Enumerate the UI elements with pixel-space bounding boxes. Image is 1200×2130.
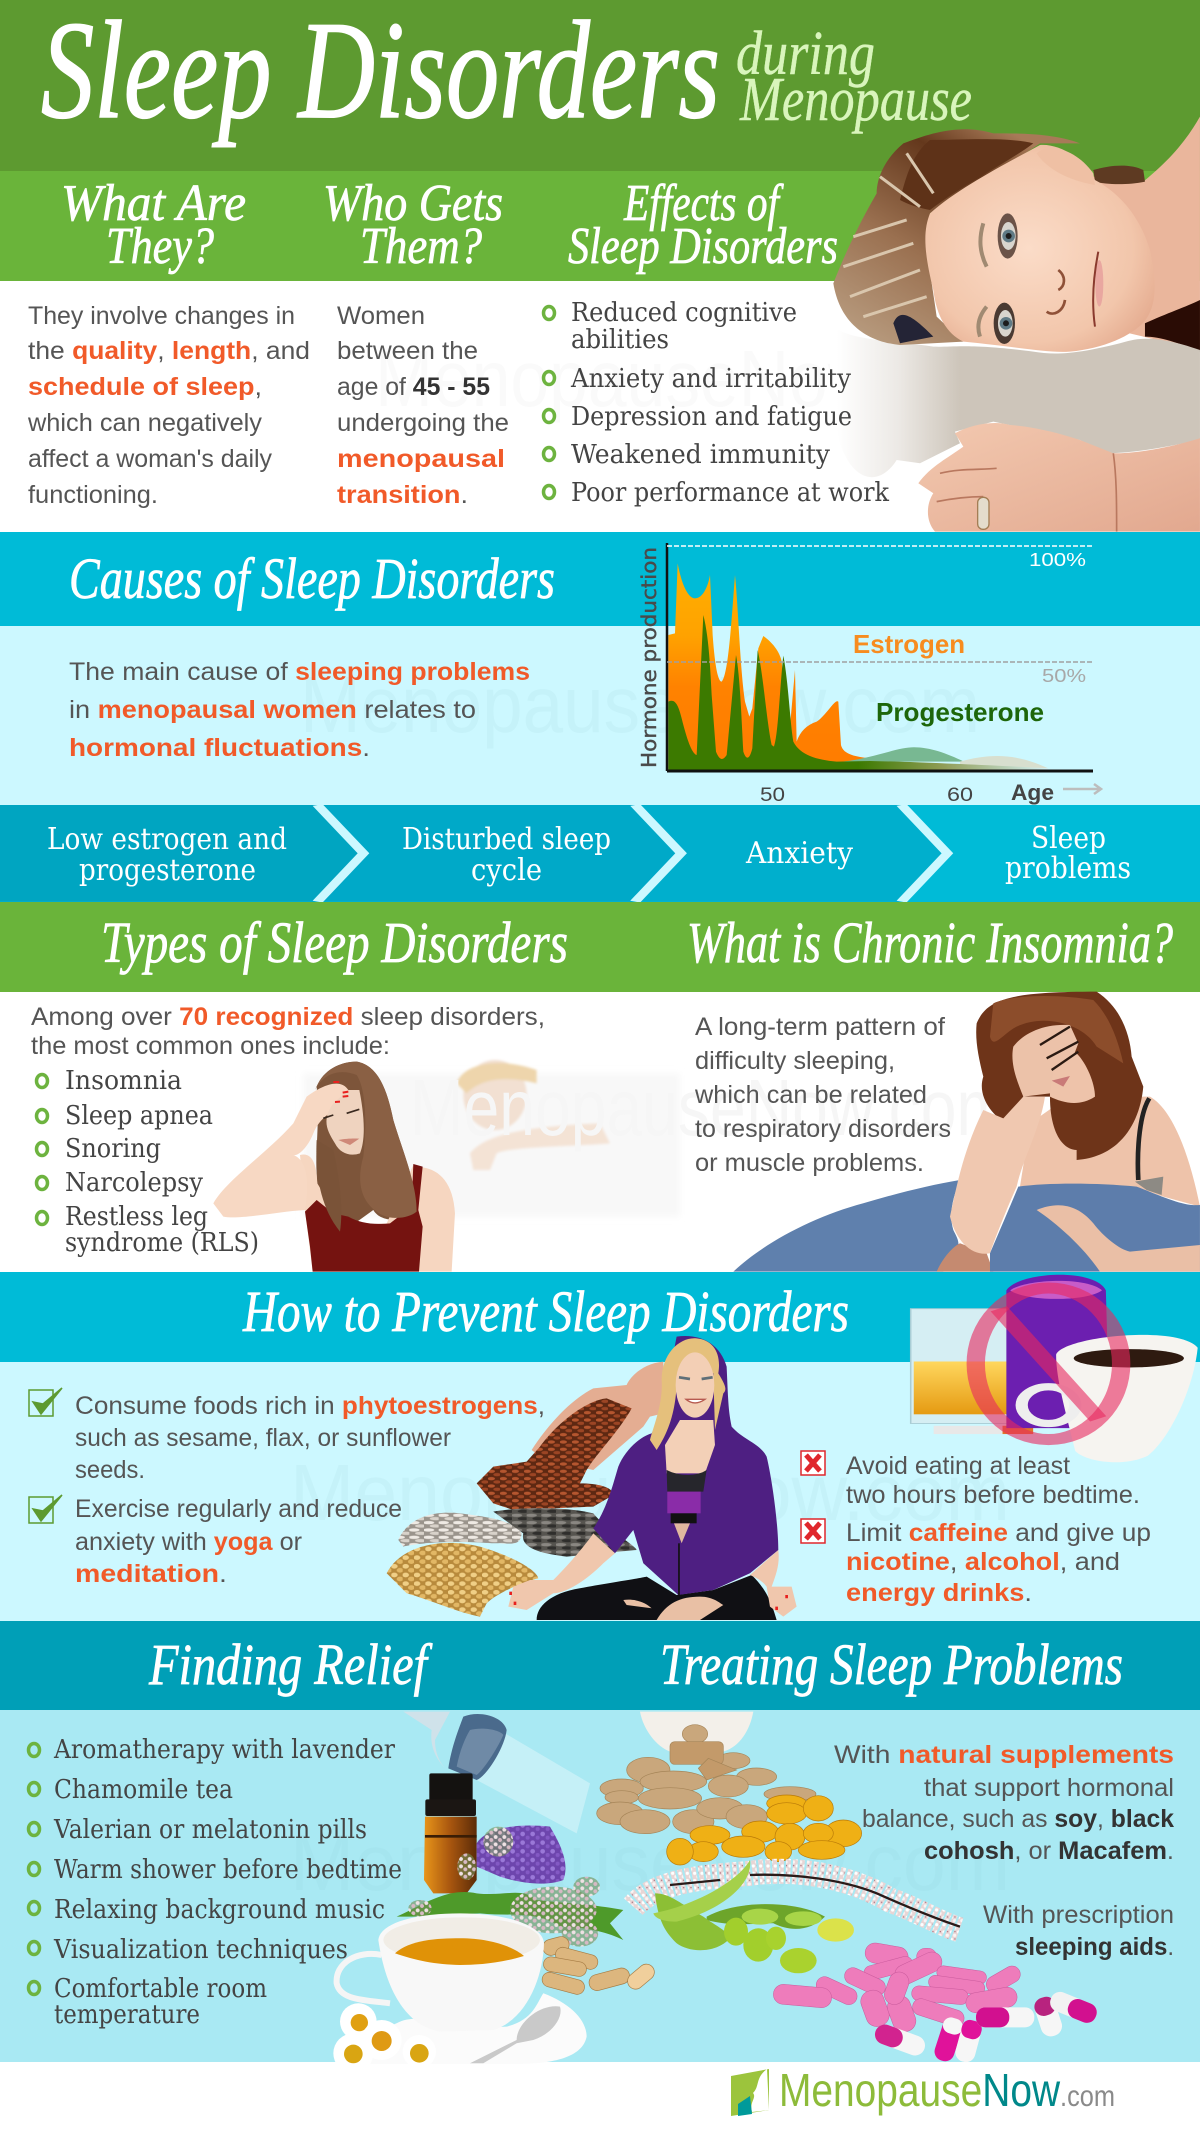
face <box>925 145 1155 352</box>
chart labels: Progesterone <box>876 697 1044 727</box>
text block: main cause <box>69 658 530 762</box>
process: chevron flow <box>0 805 1200 902</box>
text block: limit caffeine: Limit caffeine and give up <box>846 1519 1151 1547</box>
icon: logo profile <box>731 2069 769 2116</box>
heading: finding relief: Finding Relief <box>148 1632 433 1697</box>
icon: prohibition sign <box>976 1288 1121 1440</box>
step 4: problems <box>1005 851 1131 886</box>
nose <box>1047 270 1065 314</box>
icon: tablets <box>597 1725 816 1834</box>
face <box>326 1090 364 1155</box>
front hair <box>315 1062 417 1218</box>
raised arm <box>213 1084 348 1217</box>
text block: chronic insomnia: or muscle problems. <box>695 1149 924 1177</box>
chart labels: Age <box>1011 780 1054 805</box>
spray <box>477 1733 590 1833</box>
illustration: woman meditating <box>508 1336 797 1620</box>
footer logo <box>731 2064 1115 2116</box>
back hair <box>316 1062 417 1232</box>
chart labels: 100% <box>1029 550 1086 570</box>
arrow: age axis <box>1063 784 1101 794</box>
text block: exercise <box>75 1495 402 1588</box>
text block: phytoestrogens <box>75 1392 545 1484</box>
illustration: aromatherapy and tea <box>333 1712 658 2073</box>
text block: phytoestrogens: Consume foods rich in phytoestrogens , <box>75 1392 545 1420</box>
icon: check 1 <box>29 1388 62 1416</box>
text block: natural supplements: With natural supplements <box>834 1741 1174 1769</box>
list: effects: Depression and fatigue <box>571 402 852 432</box>
hair <box>976 992 1143 1160</box>
illustration: supplements <box>597 1712 960 1973</box>
step 1 <box>47 822 287 888</box>
bra strap <box>1138 1098 1149 1180</box>
text block: what are they: which can negatively <box>27 409 262 437</box>
text block: what are they: the quality, length, and <box>28 337 310 365</box>
arms <box>508 1533 797 1617</box>
text block: who gets them: transition . <box>337 481 468 509</box>
scoop <box>532 1362 663 1470</box>
text block: avoid eating <box>846 1452 1140 1509</box>
icon: essential oil bottle <box>424 1773 477 1893</box>
text block: limit caffeine: nicotine , alcohol , and <box>846 1548 1120 1576</box>
lips <box>1093 252 1103 327</box>
heading: Who Gets Them?: Who Gets <box>323 175 503 232</box>
chart labels: 50 <box>760 785 785 806</box>
list: types: Snoring <box>65 1134 161 1164</box>
list: types: Insomnia <box>65 1066 182 1096</box>
two-tone capsules <box>872 1989 1100 2064</box>
panel: title banner <box>0 0 1200 171</box>
text block: what are they: functioning. <box>28 481 158 509</box>
red top <box>305 1164 423 1272</box>
heading: What Are They?: What Are <box>61 175 246 232</box>
text block: chronic insomnia: which can be related <box>694 1081 927 1109</box>
step 2: Disturbed sleep <box>402 822 611 857</box>
chest <box>665 1420 715 1473</box>
logo wordmark: MenopauseNow.com <box>779 2064 1115 2116</box>
heading: Who Gets Them? <box>323 175 503 275</box>
icon: teacup <box>337 1913 544 2032</box>
illustration: blurred sleeper <box>303 1060 680 1217</box>
icon: pink capsules <box>773 1941 1100 2064</box>
pillow <box>830 327 1200 477</box>
white sunflower seeds <box>398 1513 522 1547</box>
list: effects: abilities <box>571 325 669 355</box>
chart labels: 50% <box>1042 666 1086 686</box>
list: effects: Reduced cognitive <box>571 298 797 328</box>
sports top <box>667 1470 707 1595</box>
icon: daisies <box>333 2003 436 2073</box>
text block: exercise: meditation . <box>75 1560 227 1588</box>
list: types: syndrome (RLS) <box>65 1228 259 1258</box>
chart: hormone production <box>637 543 1101 806</box>
text block: who gets them: age of 45 - 55 <box>337 373 490 401</box>
text block: prescription <box>983 1901 1174 1961</box>
neck and shoulder <box>1087 117 1200 350</box>
step 4 <box>1005 821 1131 886</box>
illustration: avoided drinks <box>911 1275 1198 1462</box>
step 2: cycle <box>471 853 542 888</box>
icon: lavender <box>477 1825 565 1884</box>
step 4: Sleep <box>1031 821 1106 856</box>
hoodie <box>593 1336 778 1595</box>
icon: herbs <box>397 1892 623 1940</box>
text block: who gets them: between the <box>337 337 478 365</box>
ring <box>978 497 989 529</box>
text block: types intro: Among over 70 recognized sleep disorders, <box>31 1003 545 1031</box>
chart labels: Hormone production <box>637 547 661 768</box>
hair <box>833 129 1080 345</box>
nails <box>511 1592 787 1610</box>
icon: shower head <box>403 1712 507 1780</box>
watermark: MenopauseNow.com <box>300 660 980 749</box>
list: types: Narcolepsy <box>65 1168 203 1198</box>
heading: types: Types of Sleep Disorders <box>101 910 568 975</box>
subtitle: during Menopause: during <box>736 20 875 88</box>
watermark: MenopauseNow.com <box>375 334 1025 423</box>
icon: pill bottle <box>640 1712 753 1752</box>
watermark: MenopauseNow.com <box>290 1448 1010 1537</box>
chart labels <box>637 547 1086 806</box>
list: effects: Weakened immunity <box>571 440 830 470</box>
heading: Effects of Sleep Disorders: Sleep Disorders <box>568 218 838 275</box>
text block: phytoestrogens: seeds. <box>75 1456 145 1484</box>
text block: types intro <box>31 1003 545 1060</box>
illustration: woman resting on pillow <box>830 117 1200 532</box>
illustration: tired woman with blanket <box>733 992 1200 1272</box>
text block: natural supplements <box>834 1741 1174 1865</box>
eyes <box>978 213 1018 344</box>
heading: prevention: How to Prevent Sleep Disorders <box>242 1279 849 1344</box>
text block: what are they: affect a woman's daily <box>28 445 272 473</box>
heading: Effects of Sleep Disorders <box>568 175 838 275</box>
text block: limit caffeine: energy drinks . <box>846 1579 1032 1607</box>
text block: avoid eating: two hours before bedtime. <box>846 1481 1140 1509</box>
icon: x box 2 <box>801 1519 825 1543</box>
panel: causes <box>0 532 1200 806</box>
feet <box>623 1597 723 1620</box>
text block: exercise: anxiety with yoga or <box>75 1528 302 1556</box>
text block: what are they <box>27 302 310 509</box>
heading: Effects of Sleep Disorders: Effects of <box>623 175 784 232</box>
lower skin <box>937 1243 993 1272</box>
text block: exercise: Exercise regularly and reduce <box>75 1495 402 1523</box>
text block: who gets them: Women <box>337 302 425 330</box>
heading: causes: Causes of Sleep Disorders <box>69 546 555 611</box>
text block: main cause: hormonal fluctuations . <box>69 734 370 762</box>
list: relief: Visualization techniques <box>53 1935 348 1965</box>
step 1: Low estrogen and <box>47 822 287 857</box>
list: relief: Aromatherapy with lavender <box>53 1735 396 1765</box>
step 2 <box>402 822 611 888</box>
face <box>676 1352 714 1418</box>
lower hand <box>1037 1205 1200 1272</box>
text block: avoid eating: Avoid eating at least <box>846 1452 1070 1480</box>
subtitle: during Menopause <box>736 20 972 134</box>
text block: who gets them <box>337 302 509 509</box>
heading: Who Gets Them?: Them? <box>360 218 482 275</box>
panel: intro section <box>0 117 1200 532</box>
text block: what are they: schedule of sleep , <box>28 373 262 401</box>
heading: What Are They?: They? <box>106 218 214 275</box>
watermark: MenopauseNow.com <box>290 1818 1010 1907</box>
nails <box>333 1082 348 1102</box>
torso and right arm <box>300 1155 455 1272</box>
heading: What Are They? <box>61 175 246 275</box>
list: types <box>36 1066 259 1258</box>
face <box>1050 1053 1095 1103</box>
text block: main cause: in menopausal women relates to <box>69 696 476 724</box>
text block: types intro: the most common ones include: <box>31 1032 390 1060</box>
text block: who gets them: menopausal <box>337 445 505 473</box>
icon: green pods <box>653 1860 854 1973</box>
icon: valerian flowers <box>408 1827 600 1947</box>
illustration: woman with headache <box>213 1062 455 1272</box>
panel: types and chronic insomnia <box>0 902 1200 1272</box>
blanket right <box>990 1184 1200 1272</box>
icon: x box 1 <box>801 1451 825 1475</box>
icon: saucer <box>363 1993 587 2064</box>
text block: limit caffeine <box>846 1519 1151 1607</box>
legs <box>537 1575 777 1620</box>
step 1: progesterone <box>79 853 256 888</box>
text block: prescription: With prescription <box>983 1901 1174 1929</box>
list: effects <box>544 298 889 508</box>
hand over face <box>1012 1025 1078 1097</box>
hand and forearm <box>918 423 1200 532</box>
text block: natural supplements: balance, such as soy, black <box>862 1805 1174 1833</box>
torso <box>1020 1097 1200 1207</box>
text block: natural supplements: that support hormonal <box>924 1774 1174 1802</box>
icon: herbal capsules <box>540 1935 658 1996</box>
illustration: seeds <box>387 1362 663 1617</box>
text block: natural supplements: cohosh, or Macafem. <box>924 1837 1174 1865</box>
subtitle: during Menopause: Menopause <box>739 66 972 134</box>
panel: relief and treatment <box>0 1621 1200 2073</box>
text block: prescription: sleeping aids. <box>1015 1933 1174 1961</box>
text block: chronic insomnia <box>694 1013 951 1177</box>
text block: chronic insomnia: difficulty sleeping, <box>695 1047 895 1075</box>
list: relief: temperature <box>54 2000 200 2030</box>
icon: softgels <box>667 1795 862 1865</box>
list: relief: Valerian or melatonin pills <box>53 1815 367 1845</box>
icon: check 2 <box>29 1495 62 1523</box>
list: relief: Comfortable room <box>54 1974 267 2004</box>
icon: black cohosh branch <box>633 1871 960 1930</box>
step 3: Anxiety <box>745 836 853 871</box>
list: relief <box>28 1735 402 2030</box>
list: types: Restless leg <box>65 1202 208 1232</box>
ear <box>1037 148 1095 185</box>
text block: chronic insomnia: to respiratory disorders <box>695 1115 951 1143</box>
list: types: Sleep apnea <box>65 1101 213 1131</box>
hair <box>650 1338 725 1450</box>
text block: phytoestrogens: such as sesame, flax, or sunflower <box>75 1424 451 1452</box>
text block: who gets them: undergoing the <box>337 409 509 437</box>
list: effects: Poor performance at work <box>571 478 889 508</box>
list: relief: Relaxing background music <box>54 1895 385 1925</box>
text block: chronic insomnia: A long-term pattern of <box>695 1013 945 1041</box>
icon: spoon <box>470 2006 561 2063</box>
list: relief: Chamomile tea <box>54 1775 233 1805</box>
flax pile <box>477 1398 632 1510</box>
sesame pile <box>387 1543 538 1617</box>
chart labels: 60 <box>947 785 973 806</box>
raised arm <box>950 1097 1045 1254</box>
blanket left <box>733 1180 960 1272</box>
chart labels: Estrogen <box>853 629 965 659</box>
text block: what are they: They involve changes in <box>28 302 295 330</box>
list: relief: Warm shower before bedtime <box>54 1855 402 1885</box>
list: effects: Anxiety and irritability <box>570 364 851 394</box>
text block: main cause: The main cause of sleeping problems <box>69 658 530 686</box>
watermark: MenopauseNow.com <box>410 1063 1010 1152</box>
panel: prevention <box>0 1272 1200 1621</box>
dark sunflower seeds <box>493 1508 637 1557</box>
